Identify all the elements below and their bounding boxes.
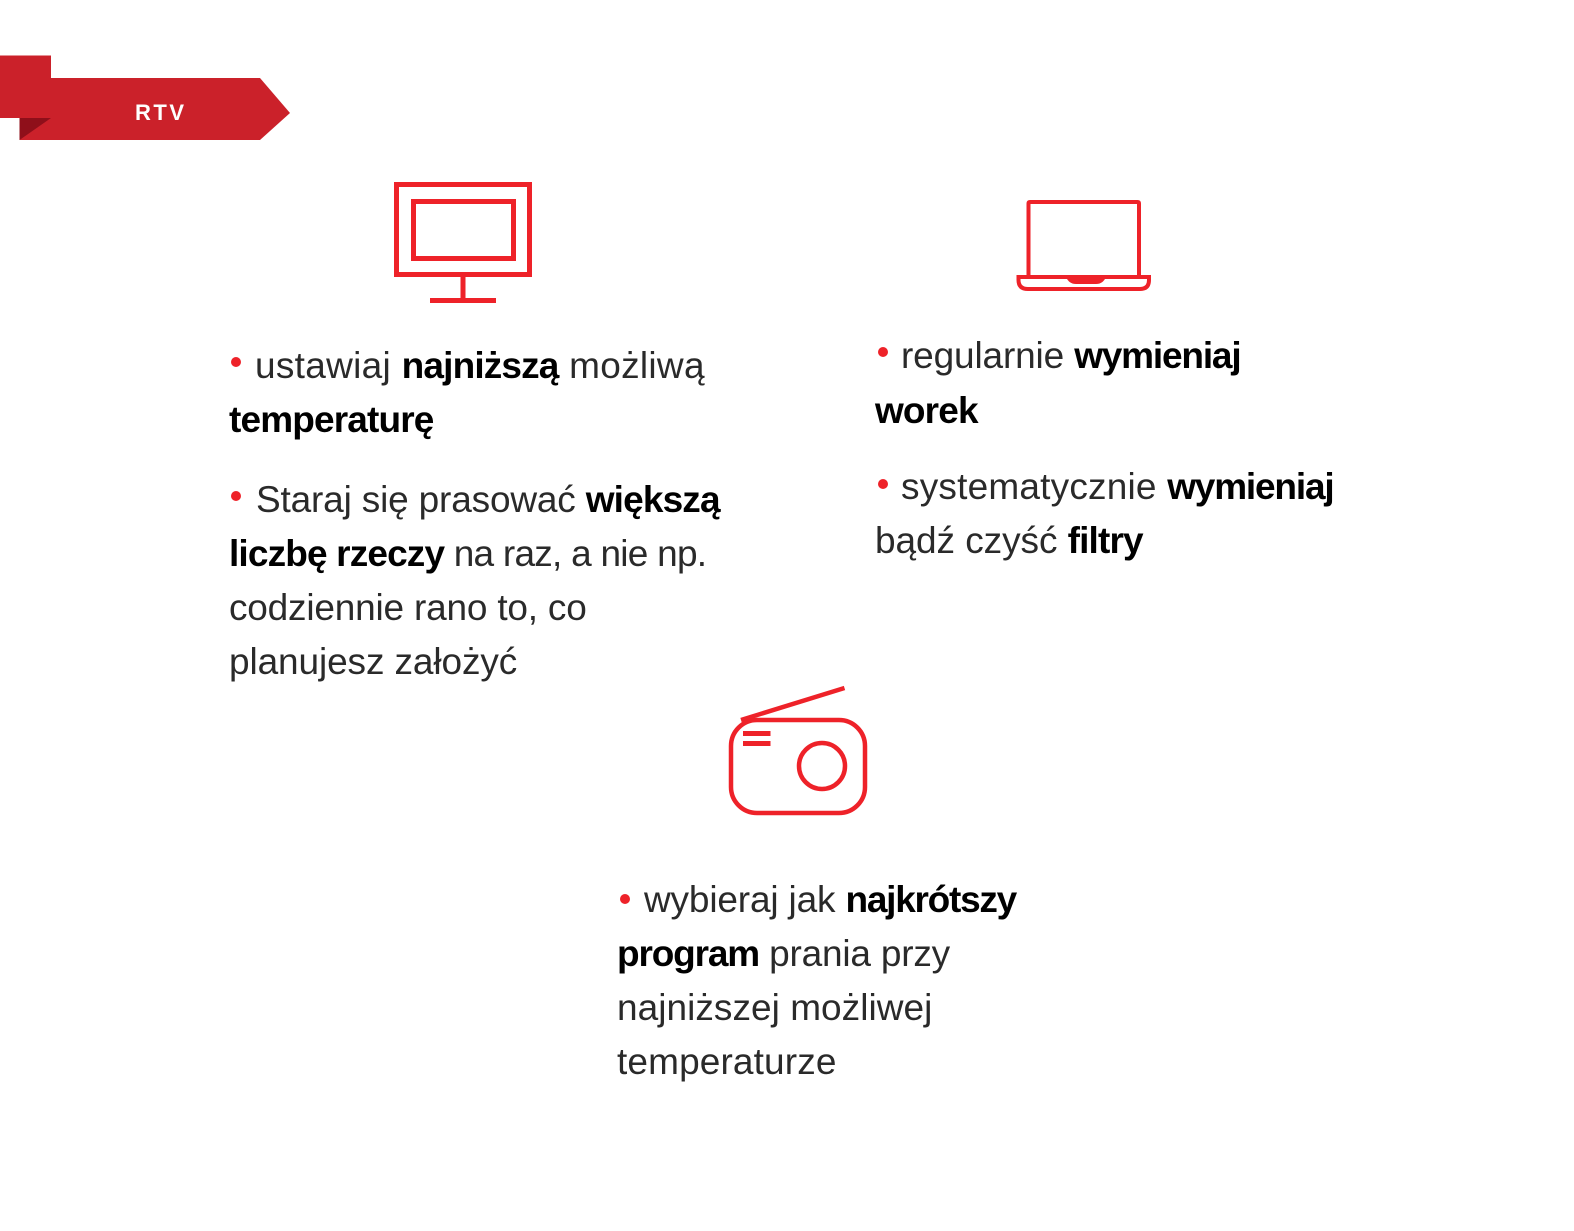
text block: monitor tip 1: ustawiaj najniższą możliwą <box>255 345 705 386</box>
text block: laptop tip 2: bądź czyść filtry <box>875 520 1143 561</box>
text block: monitor tip 1 <box>229 345 705 440</box>
text block: radio tip: program prania przy <box>617 933 950 974</box>
text block: radio tip: temperaturze <box>617 1041 837 1082</box>
text block: radio tip: wybieraj jak najkrótszy <box>644 879 1016 920</box>
text block: monitor tip 1: temperaturę <box>229 399 434 440</box>
icon: radio <box>728 686 868 816</box>
text block: laptop tip 2: systematycznie wymieniaj <box>901 466 1333 507</box>
ribbon banner: RTV: RTV <box>135 100 186 125</box>
text block: monitor tip 2 <box>229 479 721 682</box>
ribbon banner: RTV <box>0 56 290 140</box>
icon: laptop <box>1016 200 1151 291</box>
text block: laptop tip 1: regularnie wymieniaj <box>901 335 1240 376</box>
text block: laptop tip 1: worek <box>875 390 978 431</box>
text block: laptop tip 2 <box>875 466 1333 561</box>
text block: monitor tip 2: Staraj się prasować większą <box>256 479 720 520</box>
text block: monitor tip 2: liczbę rzeczy na raz, a nie np. <box>229 533 706 574</box>
text block: monitor tip 2: planujesz założyć <box>229 641 517 682</box>
icon: monitor <box>394 182 532 303</box>
text block: radio tip: najniższej możliwej <box>617 987 932 1028</box>
text block: laptop tip 1 <box>874 335 1240 431</box>
text block: monitor tip 2: codziennie rano to, co <box>229 587 587 628</box>
text block: radio tip <box>617 879 1017 1082</box>
